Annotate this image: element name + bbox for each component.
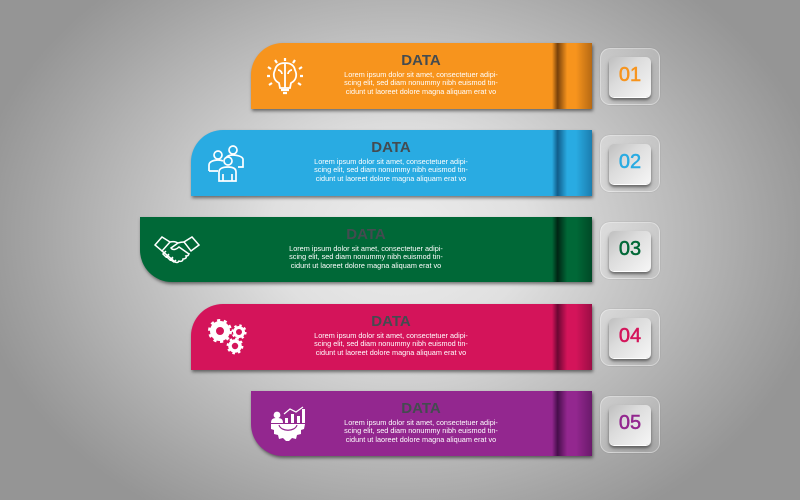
text block: cidunt ut laoreet dolore magna aliquam erat vo <box>316 174 466 183</box>
text block: Lorem ipsum dolor sit amet, consectetuer adipi- <box>314 156 468 166</box>
heading: DATA <box>401 52 441 69</box>
tile: number 04: 04 <box>619 325 641 347</box>
heading: DATA <box>371 139 411 156</box>
text block: Lorem ipsum dolor sit amet, consectetuer adipi- <box>314 330 468 340</box>
tile: number 01: 01 <box>619 64 641 86</box>
panel: item 2 blue <box>191 130 592 196</box>
text block <box>344 70 498 96</box>
text block: Lorem ipsum dolor sit amet, consectetuer adipi- <box>344 70 498 78</box>
text block: scing elit, sed diam nonummy nibh euismod tin- <box>344 426 498 435</box>
fold shading <box>552 43 592 109</box>
panel: item 5 purple <box>251 391 592 456</box>
tile: number 02: 02 <box>619 151 641 173</box>
fold shading <box>552 391 592 456</box>
tile: number 03: 03 <box>619 238 641 260</box>
tile: number 05 <box>600 396 660 453</box>
panel: item 1 orange <box>251 43 592 109</box>
icon: people <box>208 145 244 182</box>
text block: scing elit, sed diam nonummy nibh euismod tin- <box>344 78 498 87</box>
text block: scing elit, sed diam nonummy nibh euismod tin- <box>314 165 468 174</box>
fold shading <box>552 304 592 370</box>
icon: gears <box>208 319 247 354</box>
heading: DATA <box>346 226 386 243</box>
tile: number 05: 05 <box>619 412 641 434</box>
tile: number 03 <box>600 222 660 279</box>
panel: item 3 green <box>140 217 592 282</box>
icon: handshake <box>154 236 200 264</box>
heading: DATA <box>371 313 411 330</box>
text block: cidunt ut laoreet dolore magna aliquam erat vo <box>316 348 466 357</box>
panel: item 4 crimson <box>191 304 592 370</box>
text block: cidunt ut laoreet dolore magna aliquam erat vo <box>346 435 496 444</box>
text block: cidunt ut laoreet dolore magna aliquam erat vo <box>291 261 441 270</box>
text block <box>314 330 468 357</box>
text block: cidunt ut laoreet dolore magna aliquam erat vo <box>346 87 496 96</box>
tile: number 02 <box>600 135 660 192</box>
text block <box>289 244 443 270</box>
text block: scing elit, sed diam nonummy nibh euismod tin- <box>314 339 468 348</box>
fold shading <box>552 130 592 196</box>
text block: Lorem ipsum dolor sit amet, consectetuer adipi- <box>289 244 443 252</box>
icon: gear with chart <box>271 406 305 441</box>
tile: number 01 <box>600 48 660 105</box>
text block <box>344 418 498 444</box>
tile: number 04 <box>600 309 660 366</box>
heading: DATA <box>401 400 441 417</box>
text block: scing elit, sed diam nonummy nibh euismod tin- <box>289 252 443 261</box>
text block: Lorem ipsum dolor sit amet, consectetuer adipi- <box>344 418 498 426</box>
fold shading <box>552 217 592 282</box>
icon: lightbulb brain <box>267 58 303 94</box>
text block <box>314 156 468 183</box>
